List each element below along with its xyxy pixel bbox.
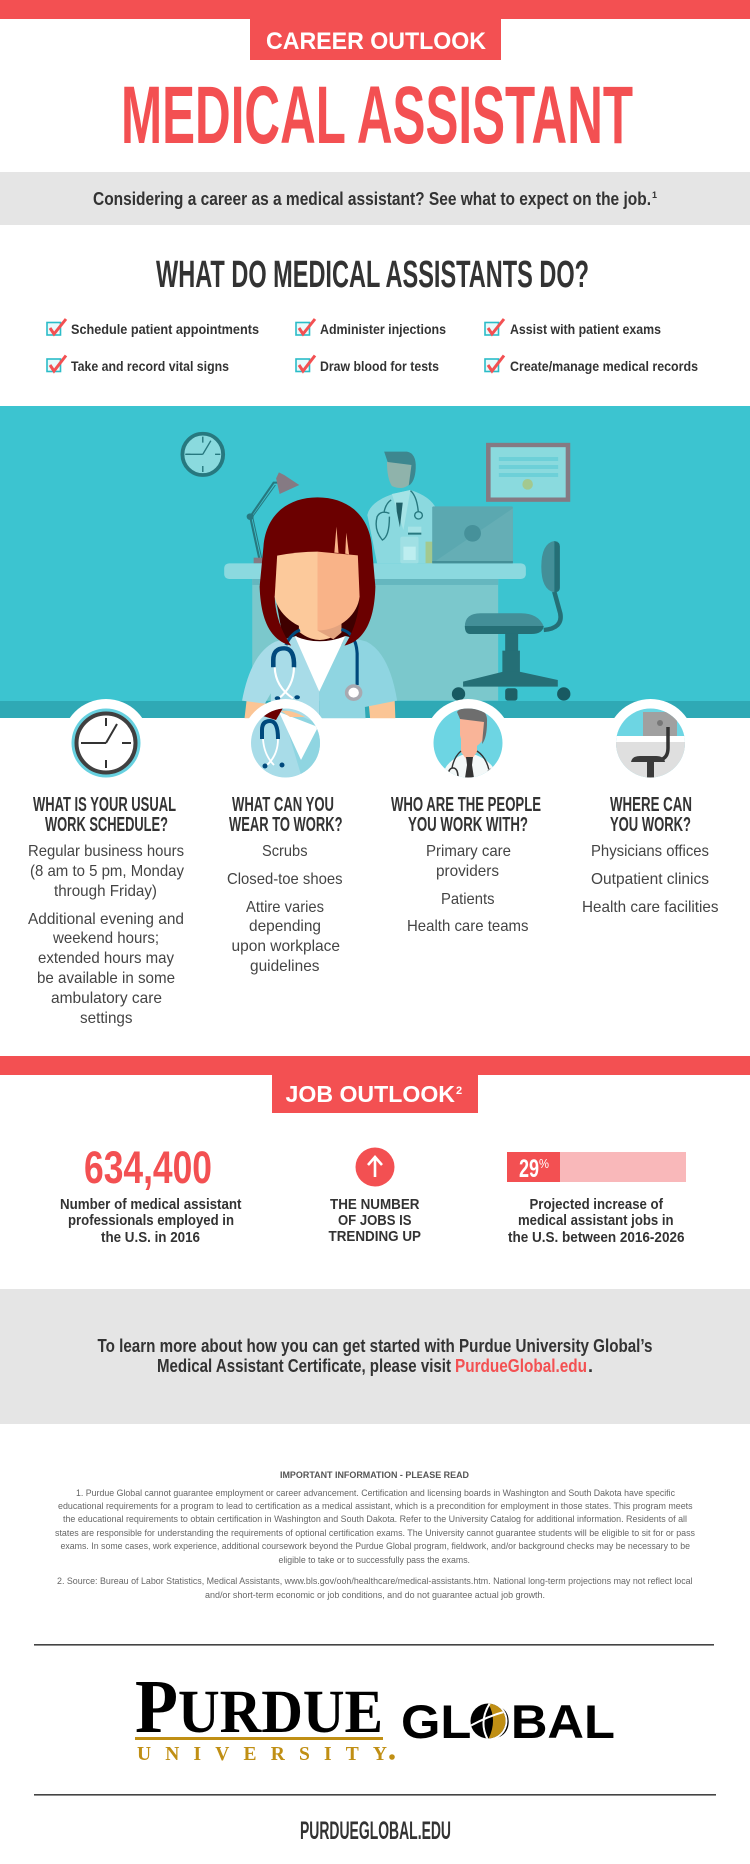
heading: where can you work [610,793,692,836]
text: people list: Primary care [426,843,511,860]
item: take and record vital signs: Take and record vital signs [71,358,229,374]
item: schedule patient appointments: Schedule patient appointments [71,321,259,337]
text: attire list: guidelines [250,958,320,975]
heading: who are the people: WHO ARE THE PEOPLE [391,793,541,816]
logo: purdue university [135,1665,395,1765]
wall clock [182,434,223,475]
icon: up arrow [356,1148,394,1186]
progress bar 29 percent [507,1152,686,1183]
text: attire list: Closed-toe shoes [227,871,342,888]
website footer: PURDUEGLOBAL.EDU [300,1817,451,1845]
stat: professionals employed: Number of medical assistant [60,1196,242,1213]
text: people list: Patients [441,891,494,908]
text: schedule details: ambulatory care [51,990,162,1007]
checklist of duties [47,319,698,374]
panel: what to wear [227,699,342,975]
tab label: job outlook: 2 [456,1085,462,1097]
logo: purdue university: UNIVERSITY [137,1744,387,1765]
tab label: career outlook: CAREER OUTLOOK [266,28,487,55]
call to action band [0,1289,750,1424]
desk [224,563,526,701]
logo: global: GLOBAL [401,1696,615,1749]
icon: doctor [432,699,504,778]
disclaimer: important information: 2. Source: Bureau of Labor Statistics, Medical Assistants, www.bls.gov/ooh/healthcare/medical-assistants.htm. National long-term projections may not reflect local [57,1576,693,1586]
text: schedule details: settings [80,1010,132,1027]
text: schedule details: Regular business hours [28,843,184,860]
item: draw blood for tests [296,356,439,374]
job outlook bar and tab [0,1056,750,1113]
heading: usual work schedule: WORK SCHEDULE? [45,813,168,836]
heading: usual work schedule: WHAT IS YOUR USUAL [33,793,176,816]
panel: where you work [582,699,718,916]
stat: professionals employed: 634,400 [84,1142,212,1193]
text: people list [407,843,528,935]
item: create and manage medical records: Create/manage medical records [510,358,698,374]
icon: globe [470,1704,508,1738]
stat: projected increase: Projected increase of [530,1196,664,1213]
disclaimer: important information: educational requirements for a program to lead to certification as a medical assistant, which is a precondition for employment in those states. This program meets [58,1501,693,1511]
text: schedule details: through Friday) [54,883,157,900]
desk lamp [247,472,299,563]
heading: what can you wear: WHAT CAN YOU [232,793,334,816]
illustration: office scene [0,406,750,718]
disclaimer: important information: states are responsible for understanding the requirements of optional certification exams. The University cannot guarantee students will be eligible to sit for or pass [55,1528,696,1538]
stat: jobs trending up: THE NUMBER [330,1196,420,1213]
text: schedule details: (8 am to 5 pm, Monday [30,863,184,880]
stat: projected increase [507,1152,686,1246]
heading: who are the people [391,793,541,836]
text: attire list: Scrubs [262,843,308,860]
disclaimer: important information: the educational requirements to obtain certification in Washington and South Dakota. Refer to the University Catalog for additional information. Residents of all [63,1514,687,1524]
text: attire list: Attire varies [246,899,324,916]
panel: work schedule [28,699,184,1027]
text: attire list: depending [249,918,321,935]
disclaimer: important information: exams. In some cases, work experience, additional coursework beyond the Purdue Global program, fieldwork, and/or background checks may be necessary to be [60,1541,690,1551]
item: administer injections [296,319,446,337]
call to action band: . [588,1356,593,1376]
heading: where can you work: WHERE CAN [610,793,692,816]
disclaimer: important information: and/or short-term economic or job conditions, and do not guarantee actual job growth. [205,1590,545,1600]
panel: who you work with [391,699,541,935]
item: assist with patient exams: Assist with patient exams [510,321,661,337]
stat: jobs trending up [328,1148,421,1245]
heading: usual work schedule [33,793,176,836]
stat: projected increase: the U.S. between 2016-2026 [508,1229,684,1246]
disclaimer: important information: 1. Purdue Global cannot guarantee employment or career advancement. Certification and licensing boards in Washington and South Dakota have specific [76,1488,676,1498]
item: create and manage medical records [485,356,698,374]
framed certificate [488,445,568,500]
text: people list: Health care teams [407,918,528,935]
text: attire list [227,843,342,975]
tab label: job outlook: JOB OUTLOOK [286,1081,455,1107]
doctor in background [367,452,437,563]
intro band [0,172,750,225]
text: workplaces list: Outpatient clinics [591,871,709,888]
disclaimer: important information: IMPORTANT INFORMATION - PLEASE READ [280,1470,469,1481]
heading: what can you wear: WEAR TO WORK? [229,813,342,836]
item: assist with patient exams [485,319,661,337]
stat: jobs trending up: OF JOBS IS [338,1212,412,1229]
text: schedule details: extended hours may [38,950,174,967]
text: schedule details: weekend hours; [52,930,159,947]
disclaimer: important information [55,1470,696,1600]
logo: purdue university: URDUE [178,1679,383,1746]
office chair [452,541,570,701]
stat: professionals employed [60,1142,242,1246]
progress bar 29 percent: % [539,1156,549,1171]
icon: scrubs and stethoscope [249,699,322,778]
intro band: Considering a career as a medical assistant? See what to expect on the job. [93,189,651,209]
text: workplaces list [582,843,718,916]
stat: professionals employed: the U.S. in 2016 [101,1229,200,1246]
item: draw blood for tests: Draw blood for tests [320,358,439,374]
stat: jobs trending up: TRENDING UP [328,1228,421,1245]
progress bar 29 percent: 29 [519,1155,539,1183]
intro band: 1 [652,190,657,200]
logo: global [403,1704,614,1738]
text: workplaces list: Physicians offices [591,843,709,860]
disclaimer: important information: eligible to take or to successfully pass the exams. [278,1555,470,1565]
call to action band: To learn more about how you can get started with Purdue University Global’s [98,1336,652,1356]
call to action band: PurdueGlobal.edu [455,1356,587,1376]
laptop [432,506,513,563]
text: attire list: upon workplace [232,938,340,955]
medical assistant figure [242,497,397,718]
stat: professionals employed: professionals employed in [68,1212,234,1229]
heading: what can you wear [229,793,342,836]
item: take and record vital signs [47,356,229,374]
icon: clock [62,699,150,787]
logo: purdue university: P [135,1665,178,1749]
text: schedule details [28,843,184,1027]
stat: projected increase: medical assistant jobs in [518,1212,674,1229]
call to action band: Medical Assistant Certificate, please visit [157,1356,451,1376]
text: schedule details: be available in some [37,970,175,987]
heading: where can you work: YOU WORK? [610,813,691,836]
text: people list: providers [436,863,499,880]
item: administer injections: Administer injections [320,321,446,337]
top red bar with career outlook tab [0,0,750,60]
heading: who are the people: YOU WORK WITH? [408,813,528,836]
text: workplaces list: Health care facilities [582,899,718,916]
text: schedule details: Additional evening and [28,911,184,928]
icon: office desk and chair [614,699,687,778]
